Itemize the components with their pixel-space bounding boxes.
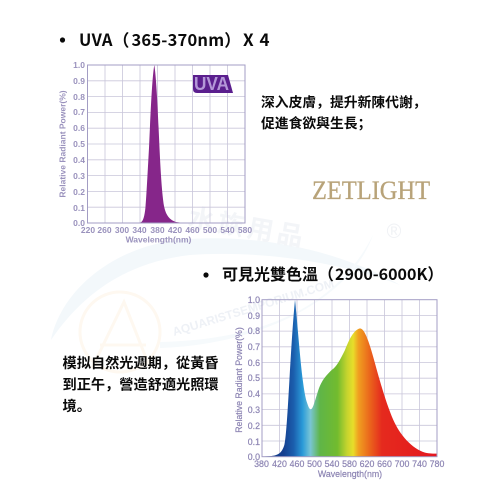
y axis labels: 0.0	[248, 452, 260, 462]
chart: UVA spectrum	[58, 60, 252, 244]
x axis labels: 460	[290, 459, 304, 469]
y axis labels: 0.4	[248, 389, 260, 399]
y axis labels: 0.5	[248, 373, 260, 383]
y axis labels: 0.1	[248, 437, 260, 447]
y axis labels: 0.5	[73, 139, 85, 149]
y axis labels: 0.8	[73, 92, 85, 102]
y axis labels: 0.9	[248, 311, 260, 321]
watermark: aquarists emporium logo: AQUARISTSEMPORIUM.COM	[171, 276, 336, 339]
watermark: aquarists emporium logo: ®	[387, 221, 402, 243]
y axis labels: 0.6	[248, 358, 260, 368]
heading: visible light	[203, 261, 443, 285]
heading: visible light: 2900-6000K）	[335, 261, 443, 285]
y axis labels: 0.2	[248, 421, 260, 431]
heading: UVA	[60, 26, 271, 51]
text block: daylight simulation: 到正午，營造舒適光照環	[62, 374, 219, 394]
logo: ZETLIGHT: ZETLIGHT	[312, 176, 430, 205]
heading: UVA: X 4	[243, 26, 271, 51]
y axis title: Relative Radiant Power(%)	[234, 327, 244, 433]
x axis labels: 540	[220, 225, 235, 235]
x axis labels: 620	[360, 459, 374, 469]
text block: UVA benefits	[261, 91, 427, 132]
text block: UVA benefits: 促進食欲與生長；	[261, 112, 371, 132]
y axis labels: 0.7	[248, 342, 260, 352]
x axis labels: 380	[150, 225, 165, 235]
x axis labels: 460	[185, 225, 200, 235]
text block: daylight simulation	[62, 353, 219, 416]
x axis labels: 420	[272, 459, 287, 469]
x axis labels: 500	[203, 225, 217, 235]
y axis labels: 0.6	[73, 123, 85, 133]
heading: UVA: 365-370nm）	[132, 27, 241, 51]
y axis labels: 0.3	[73, 171, 85, 181]
chart: visible light spectrum	[234, 295, 444, 479]
y axis labels: 1.0	[248, 295, 260, 305]
x axis labels	[81, 225, 252, 235]
y axis labels: 1.0	[73, 60, 85, 70]
watermark: aquarists emporium logo	[51, 197, 402, 372]
x axis labels	[254, 459, 444, 469]
text block: daylight simulation: 模拟自然光週期，從黃昏	[62, 353, 219, 373]
watermark: aquarists emporium logo: 水族用品	[186, 197, 310, 255]
x axis labels: 580	[238, 225, 252, 235]
y axis labels: 0.9	[73, 76, 85, 86]
text block: UVA benefits: 深入皮膚，提升新陳代謝，	[261, 91, 427, 111]
x axis title: Wavelength(nm)	[318, 469, 382, 479]
x axis labels: 780	[430, 459, 444, 469]
x axis labels: 740	[412, 459, 427, 469]
text block: daylight simulation: 境。	[62, 396, 91, 416]
y axis labels: 0.2	[73, 187, 85, 197]
y axis labels: 0.0	[73, 218, 85, 228]
y axis labels: 0.7	[73, 107, 85, 117]
heading: UVA: UVA（	[79, 27, 130, 51]
x axis labels: 380	[254, 459, 269, 469]
x axis labels: 340	[132, 225, 147, 235]
y axis labels: 0.3	[248, 405, 260, 415]
x axis labels: 420	[168, 225, 182, 235]
x axis labels: 540	[325, 459, 339, 469]
y axis labels: 0.8	[248, 326, 260, 336]
y axis labels	[73, 60, 85, 228]
y axis labels	[248, 295, 260, 462]
heading: visible light: 可見光雙色溫（	[222, 261, 334, 285]
x axis title: Wavelength(nm)	[126, 234, 192, 244]
y axis labels: 0.4	[73, 155, 85, 165]
x axis labels: 660	[377, 459, 392, 469]
x axis labels: 500	[307, 459, 322, 469]
x axis labels: 700	[395, 459, 409, 469]
x axis labels: 220	[81, 225, 95, 235]
x axis labels: 300	[115, 225, 129, 235]
badge: UVA: UVA	[194, 73, 229, 94]
y axis labels: 0.1	[73, 203, 85, 213]
x axis labels: 260	[97, 225, 112, 235]
x axis labels: 580	[342, 459, 357, 469]
y axis title: Relative Radiant Power(%)	[58, 90, 68, 198]
